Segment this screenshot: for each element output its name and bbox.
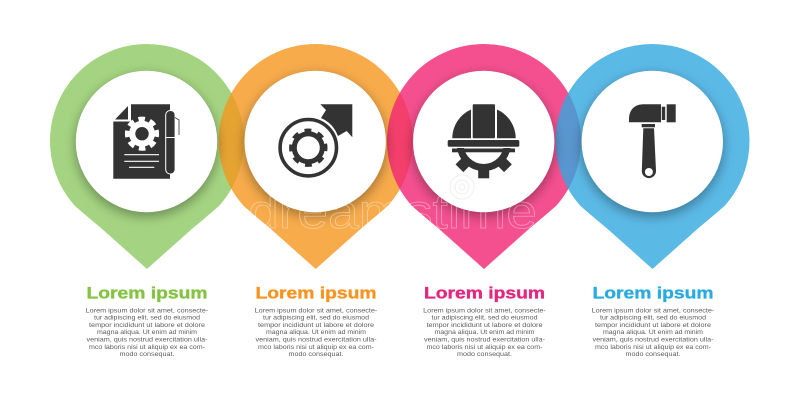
heading: blue: Lorem ipsum xyxy=(592,284,714,302)
white circle with shadow: blue xyxy=(581,71,724,217)
text block: blue: modo consequat. xyxy=(626,351,681,358)
heading: green: Lorem ipsum xyxy=(86,284,208,302)
text block: orange: mco laboris nisi ut aliquip ex ea com- xyxy=(258,344,374,351)
watermark: dreamstime xyxy=(248,186,537,239)
pin: pink xyxy=(387,44,581,269)
text block: green: mco laboris nisi ut aliquip ex ea com- xyxy=(89,344,205,351)
text block: green: veniam, quis nostrud exercitation ulla- xyxy=(86,336,208,344)
white circle with shadow: pink xyxy=(412,71,555,217)
text block: blue: tempor incididunt ut labore et dolore xyxy=(595,322,711,329)
text block: blue: mco laboris nisi ut aliquip ex ea com- xyxy=(595,344,711,351)
text block: orange: veniam, quis nostrud exercitation ulla- xyxy=(256,336,376,344)
text block: pink: tur adipiscing elit, sed do eiusmod xyxy=(432,315,538,322)
text block: blue: tur adipiscing elit, sed do eiusmod xyxy=(600,315,706,322)
text block: green xyxy=(86,307,208,358)
text block: orange xyxy=(255,307,377,358)
text block: orange: Lorem ipsum dolor sit amet, consecte- xyxy=(255,307,377,314)
watermark xyxy=(248,175,550,239)
text block: orange: tur adipiscing elit, sed do eiusmod xyxy=(263,315,369,322)
text block: green: tur adipiscing elit, sed do eiusmod xyxy=(94,315,200,322)
text block: orange: magna aliqua. Ut enim ad minim xyxy=(266,329,366,336)
text block: green: modo consequat. xyxy=(120,351,175,358)
icon: hard hat with gear xyxy=(448,104,519,178)
heading: pink: Lorem ipsum xyxy=(424,284,545,302)
pin: blue xyxy=(556,44,750,269)
white circle with shadow: green xyxy=(75,71,218,217)
text block: blue: veniam, quis nostrud exercitation ulla- xyxy=(592,336,714,344)
white circle with shadow: orange xyxy=(244,71,387,217)
text block: pink: veniam, quis nostrud exercitation ulla- xyxy=(424,336,545,344)
text block: orange: tempor incididunt ut labore et dolore xyxy=(258,322,374,329)
pin: orange xyxy=(219,44,413,269)
text block: green: magna aliqua. Ut enim ad minim xyxy=(97,329,197,336)
text block: pink: tempor incididunt ut labore et dolore xyxy=(426,322,543,329)
text block: orange: modo consequat. xyxy=(288,351,344,358)
text block: pink: magna aliqua. Ut enim ad minim xyxy=(434,329,534,336)
icon: gear with arrow xyxy=(280,104,352,176)
icon: document with gear and pen xyxy=(113,104,179,179)
heading: orange: Lorem ipsum xyxy=(256,284,376,302)
icon: hammer xyxy=(629,104,676,178)
text block: green: Lorem ipsum dolor sit amet, consecte- xyxy=(86,307,208,314)
text block: green: tempor incididunt ut labore et dolore xyxy=(89,322,205,329)
text block: pink: Lorem ipsum dolor sit amet, consecte- xyxy=(423,307,546,314)
text block: blue: Lorem ipsum dolor sit amet, consecte- xyxy=(592,307,714,314)
pin: green xyxy=(50,44,244,269)
text block: pink xyxy=(423,307,546,358)
text block: blue: magna aliqua. Ut enim ad minim xyxy=(603,329,703,336)
text block: pink: mco laboris nisi ut aliquip ex ea com- xyxy=(426,344,542,351)
text block: pink: modo consequat. xyxy=(457,351,512,358)
text block: blue xyxy=(592,307,714,358)
